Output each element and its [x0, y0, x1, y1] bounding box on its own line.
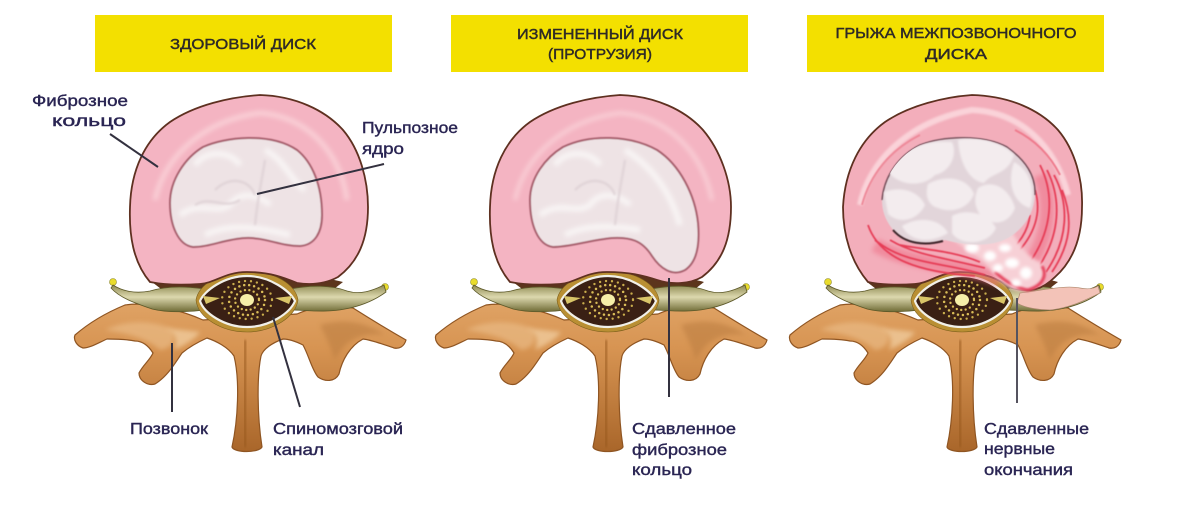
- label: Сдавленные нервные окончания: окончания: [984, 462, 1073, 479]
- label: Сдавленное фиброзное кольцо: кольцо: [632, 462, 692, 479]
- label: Сдавленные нервные окончания: [984, 298, 1089, 479]
- label: Пульпозное ядро: Пульпозное: [362, 120, 458, 137]
- label: Пульпозное ядро: ядро: [362, 141, 404, 158]
- label: Позвонок: Позвонок: [130, 421, 209, 438]
- label: Сдавленное фиброзное кольцо: [632, 278, 736, 479]
- header: здоровый диск: [95, 15, 392, 72]
- header: измененный диск: (ПРОТРУЗИЯ): [548, 46, 652, 63]
- illustration: protruding disc: [435, 95, 767, 452]
- header: грыжа диска: ГРЫЖА МЕЖПОЗВОНОЧНОГО: [836, 25, 1076, 42]
- header: измененный диск: [451, 15, 748, 72]
- header: измененный диск: ИЗМЕНЕННЫЙ ДИСК: [517, 25, 683, 43]
- label: Спиномозговой канал: Спиномозговой: [273, 421, 403, 438]
- label: Сдавленные нервные окончания: нервные: [984, 441, 1055, 458]
- label: Фиброзное кольцо: кольцо: [52, 113, 126, 130]
- label: Спиномозговой канал: канал: [273, 442, 324, 459]
- illustration: healthy disc: [74, 95, 406, 452]
- illustration: herniated disc: [789, 95, 1121, 452]
- label: Фиброзное кольцо: [32, 93, 158, 167]
- label: Сдавленное фиброзное кольцо: фиброзное: [632, 442, 727, 459]
- label: Позвонок: [130, 343, 209, 438]
- label: Сдавленные нервные окончания: Сдавленные: [984, 421, 1089, 438]
- label: Фиброзное кольцо: Фиброзное: [32, 93, 128, 110]
- header: здоровый диск: ЗДОРОВЫЙ ДИСК: [170, 35, 316, 53]
- label: Сдавленное фиброзное кольцо: Сдавленное: [632, 421, 736, 438]
- label: Пульпозное ядро: [257, 120, 458, 194]
- label: Спиномозговой канал: [273, 317, 403, 459]
- header: грыжа диска: [807, 15, 1104, 72]
- header: грыжа диска: ДИСКА: [925, 46, 987, 63]
